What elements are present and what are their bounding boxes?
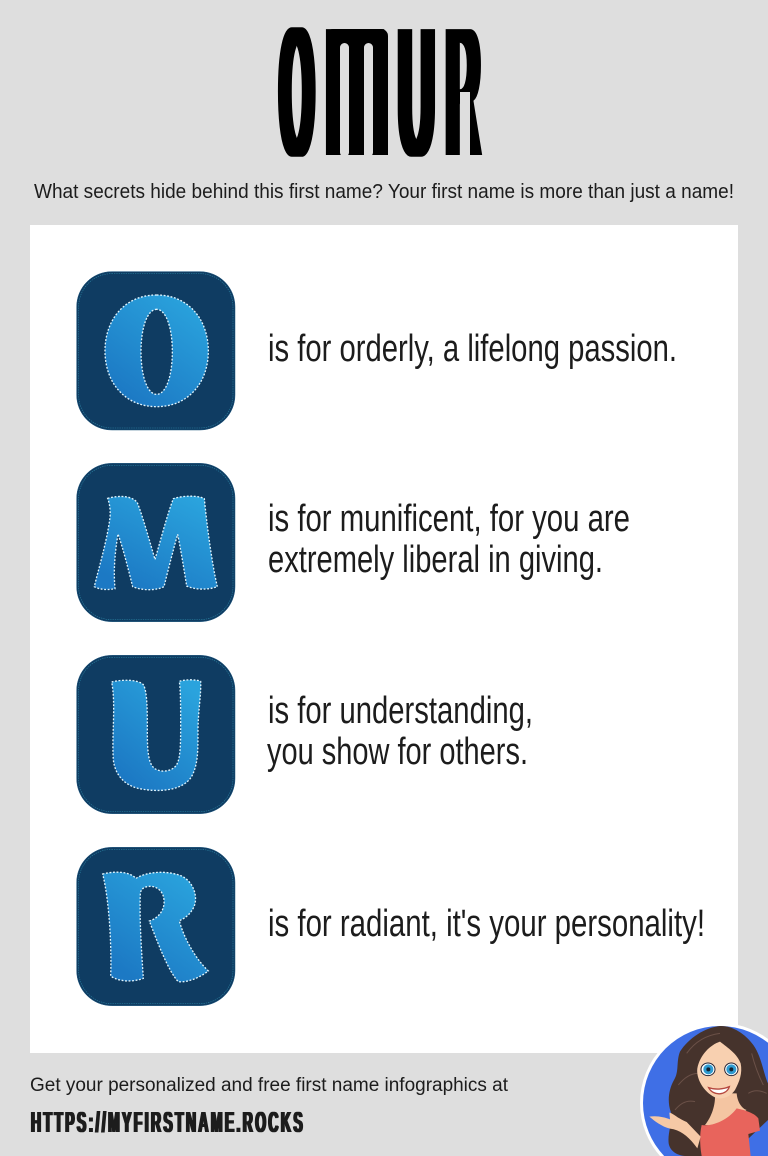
smile bbox=[709, 1087, 729, 1094]
text: M lines: is for munificent, for you are bbox=[268, 498, 630, 540]
subtitle: What secrets hide behind this first name? Your first name is more than just a name! bbox=[34, 181, 734, 203]
face bbox=[697, 1042, 741, 1098]
text: HTTPS://MYFIRSTNAME.ROCKS bbox=[31, 1107, 305, 1139]
icon: letter O bbox=[77, 272, 235, 430]
hand bbox=[649, 1113, 701, 1148]
hair bbox=[668, 1026, 768, 1156]
text: U lines: is for understanding, bbox=[268, 690, 533, 732]
icon: letter R bbox=[77, 847, 235, 1006]
avatar bbox=[640, 1023, 768, 1156]
icon: letter U bbox=[77, 655, 235, 814]
text: M lines bbox=[268, 498, 630, 581]
hair highlights bbox=[675, 1033, 767, 1110]
title bbox=[281, 0, 479, 195]
text: M lines: extremely liberal in giving. bbox=[268, 539, 603, 581]
neck bbox=[705, 1093, 747, 1127]
panel: letters bbox=[30, 225, 738, 1053]
eyes bbox=[701, 1063, 715, 1076]
text: U lines bbox=[267, 690, 533, 773]
footer text: Get your personalized and free first name infographics at bbox=[30, 1075, 509, 1096]
icon: letter M bbox=[77, 463, 235, 622]
text: U lines: you show for others. bbox=[267, 731, 528, 773]
shirt bbox=[700, 1108, 760, 1156]
